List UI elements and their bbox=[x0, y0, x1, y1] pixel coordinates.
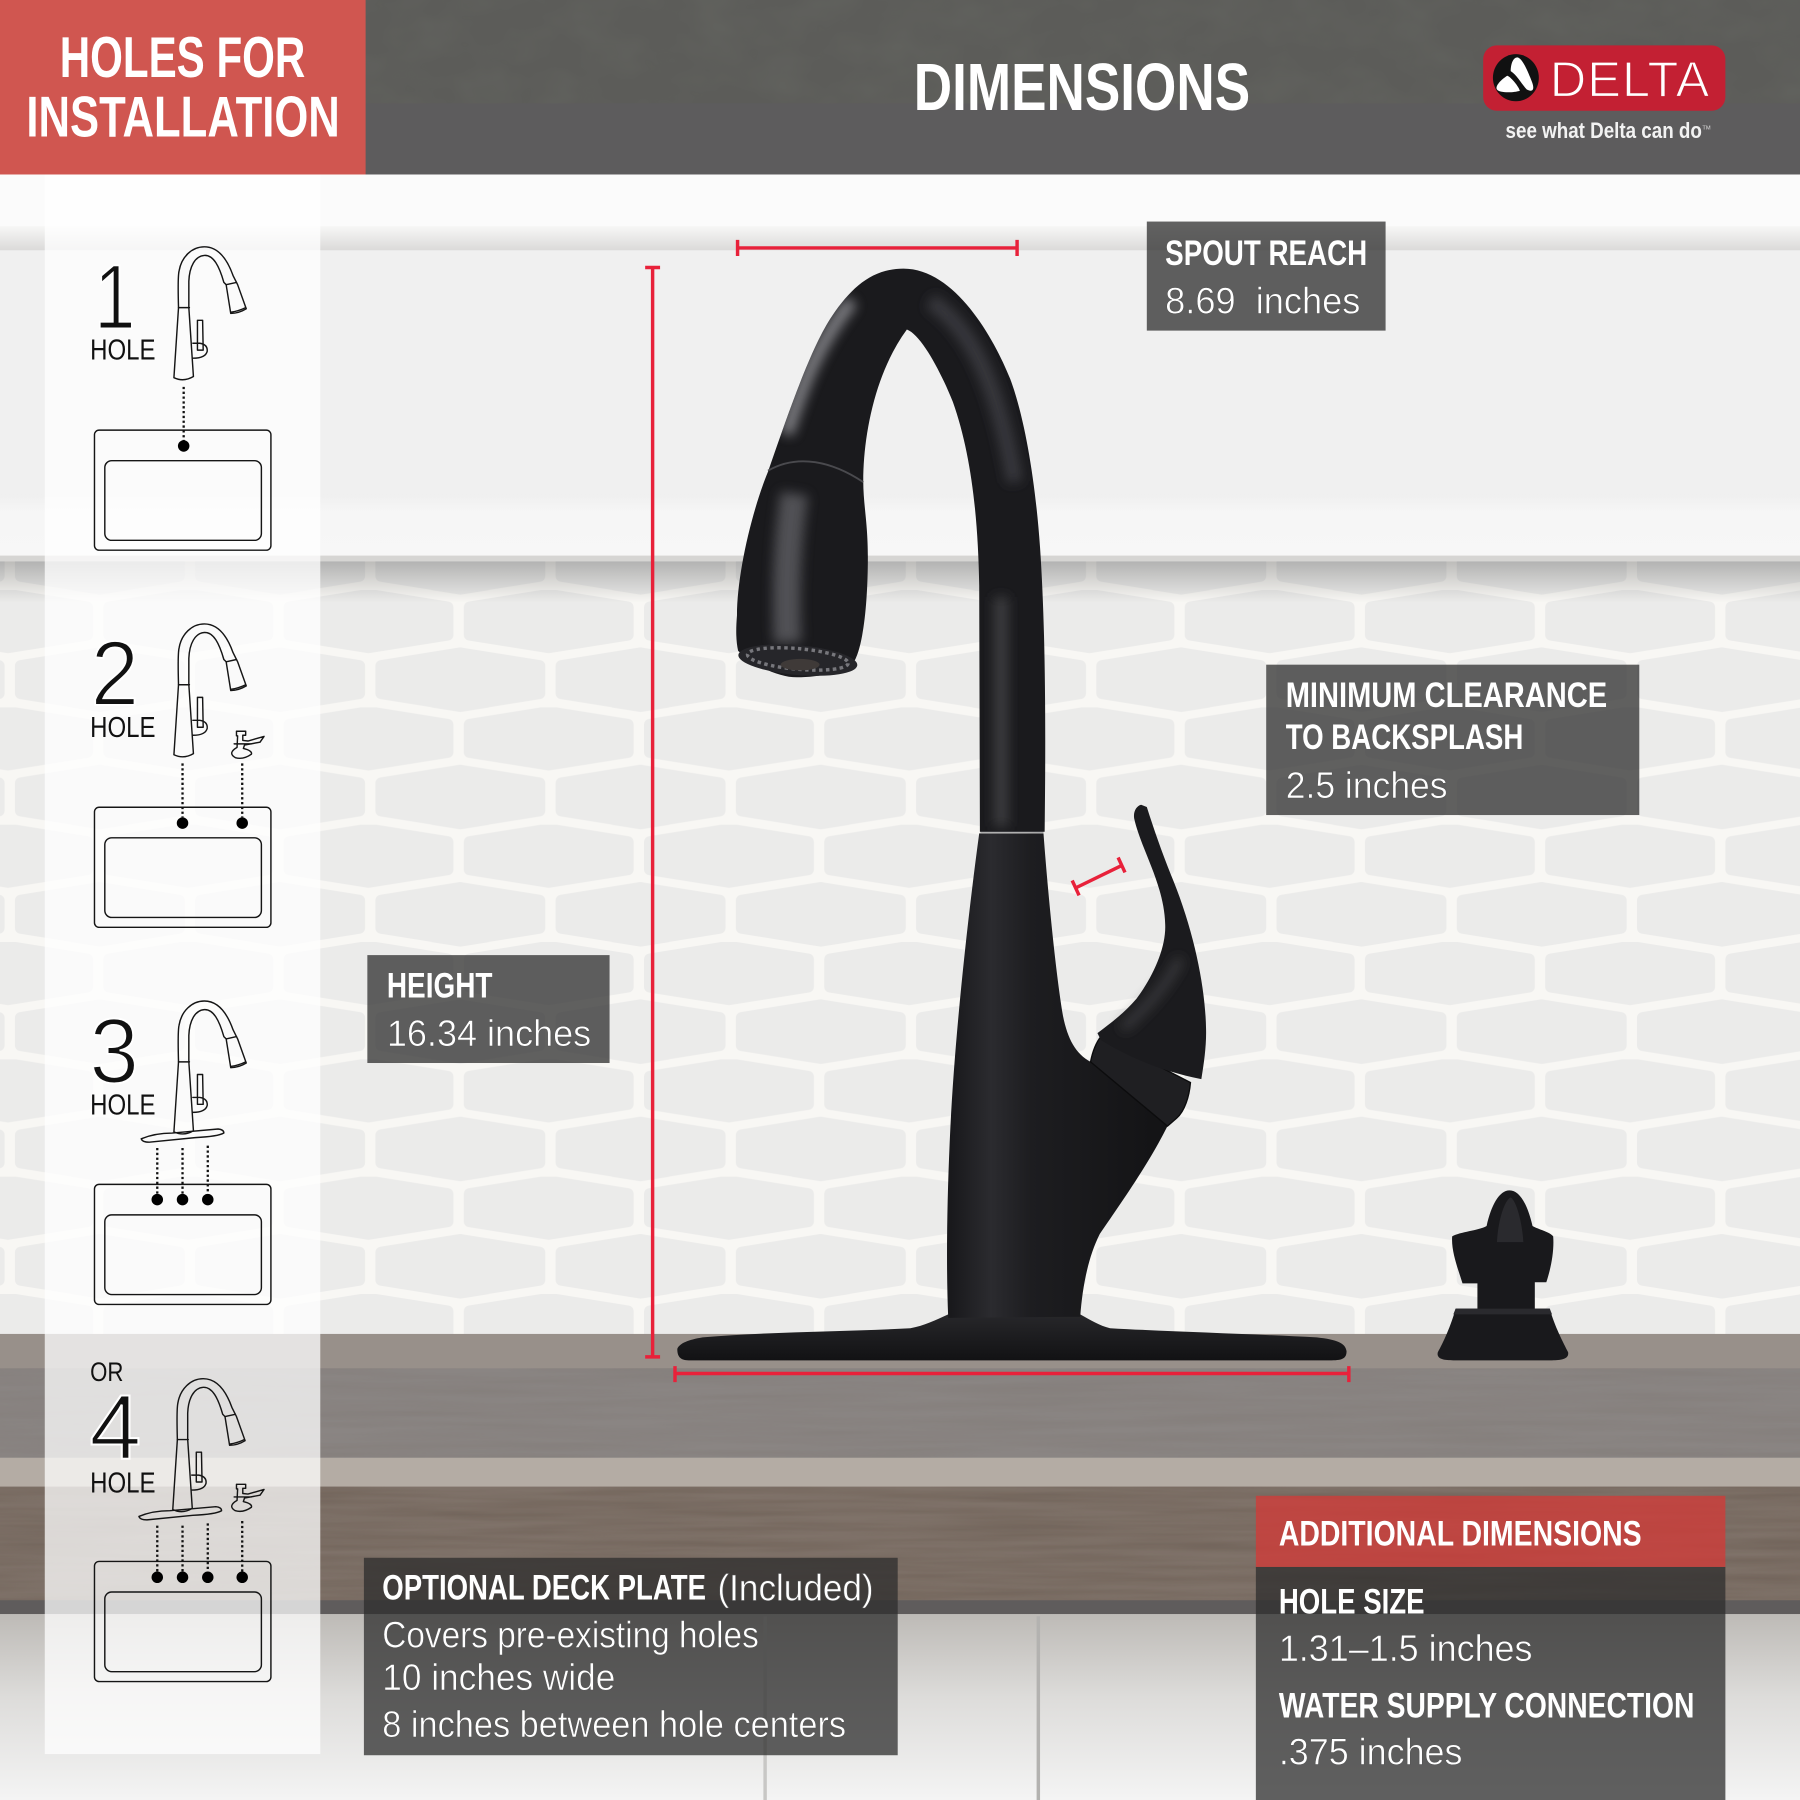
icon: 1 hole installation bbox=[90, 246, 271, 550]
callout: minimum clearance: TO BACKSPLASH bbox=[1286, 717, 1523, 757]
spout and spray head bbox=[736, 269, 1045, 832]
callout: optional deck plate: Covers pre-existing holes bbox=[382, 1614, 759, 1655]
icon: 1 hole installation: 1 bbox=[94, 246, 135, 348]
soap dispenser bbox=[1438, 1190, 1568, 1360]
callout: optional deck plate bbox=[364, 1558, 898, 1755]
icon: or 4 hole installation: HOLE bbox=[90, 1467, 156, 1499]
callout: minimum clearance: 2.5 inches bbox=[1286, 765, 1448, 806]
wall background bbox=[0, 0, 1800, 562]
callout: spout reach: 8.69 inches bbox=[1165, 280, 1360, 321]
panel: additional dimensions bbox=[1256, 1496, 1725, 1800]
icon: 1 hole installation: HOLE bbox=[90, 334, 156, 366]
panel: additional dimensions: 1.31–1.5 inches bbox=[1279, 1628, 1533, 1669]
icon: 3 hole installation bbox=[90, 1001, 271, 1304]
heading panel: holes for installation: INSTALLATION bbox=[26, 86, 340, 150]
dimension arrow: height bbox=[645, 266, 660, 1358]
header bar bbox=[365, 0, 1800, 174]
tiled backsplash bbox=[0, 561, 1800, 1335]
handle lever bbox=[1097, 805, 1206, 1079]
callout: spout reach bbox=[1147, 222, 1386, 331]
faucet bbox=[677, 269, 1568, 1360]
dimension arrow: backsplash clearance bbox=[1072, 858, 1125, 895]
countertop bbox=[0, 1334, 1800, 1615]
heading panel: holes for installation bbox=[0, 0, 366, 174]
panel: additional dimensions: HOLE SIZE bbox=[1279, 1581, 1425, 1621]
icon: or 4 hole installation bbox=[90, 1357, 271, 1682]
panel: additional dimensions: WATER SUPPLY CONNECTION bbox=[1279, 1685, 1694, 1725]
icon: 3 hole installation: HOLE bbox=[90, 1090, 156, 1122]
heading panel: holes for installation: HOLES FOR bbox=[60, 26, 305, 90]
icon: or 4 hole installation: OR bbox=[90, 1357, 123, 1387]
callout: height bbox=[367, 955, 610, 1063]
callout: height: 16.34 inches bbox=[387, 1013, 591, 1054]
cabinet doors bbox=[0, 1614, 1800, 1800]
faucet body bbox=[947, 833, 1167, 1318]
translucent panel: holes for installation bbox=[45, 174, 320, 1754]
dimension arrow: spout reach bbox=[737, 240, 1017, 256]
callout: minimum clearance: MINIMUM CLEARANCE bbox=[1286, 675, 1607, 715]
delta logo: see what Delta can do bbox=[1506, 118, 1702, 143]
callout: height: HEIGHT bbox=[387, 966, 493, 1006]
callout: optional deck plate: OPTIONAL DECK PLATE bbox=[382, 1568, 706, 1608]
icon: 2 hole installation: HOLE bbox=[90, 712, 156, 744]
dimension arrow: deck plate width bbox=[675, 1366, 1349, 1382]
panel: additional dimensions: .375 inches bbox=[1279, 1731, 1462, 1772]
icon: 2 hole installation: 2 bbox=[91, 623, 139, 725]
callout: optional deck plate: (Included) bbox=[717, 1567, 874, 1608]
icon: 3 hole installation: 3 bbox=[90, 1001, 139, 1103]
delta logo: DELTA bbox=[1550, 50, 1710, 107]
delta logo bbox=[1483, 45, 1725, 143]
deck plate bbox=[677, 1314, 1347, 1360]
callout: optional deck plate: 8 inches between hole centers bbox=[382, 1704, 846, 1745]
title: DIMENSIONS bbox=[914, 51, 1250, 125]
callout: spout reach: SPOUT REACH bbox=[1165, 233, 1367, 273]
delta logo: TM bbox=[1702, 126, 1711, 132]
callout: optional deck plate: 10 inches wide bbox=[382, 1657, 615, 1698]
spray nozzle bbox=[737, 640, 859, 680]
panel: additional dimensions: ADDITIONAL DIMENSIONS bbox=[1279, 1514, 1642, 1554]
callout: minimum clearance bbox=[1266, 665, 1639, 815]
icon: 2 hole installation bbox=[90, 623, 271, 927]
icon: or 4 hole installation: 4 bbox=[90, 1377, 141, 1479]
handle hub bbox=[1091, 1037, 1190, 1126]
